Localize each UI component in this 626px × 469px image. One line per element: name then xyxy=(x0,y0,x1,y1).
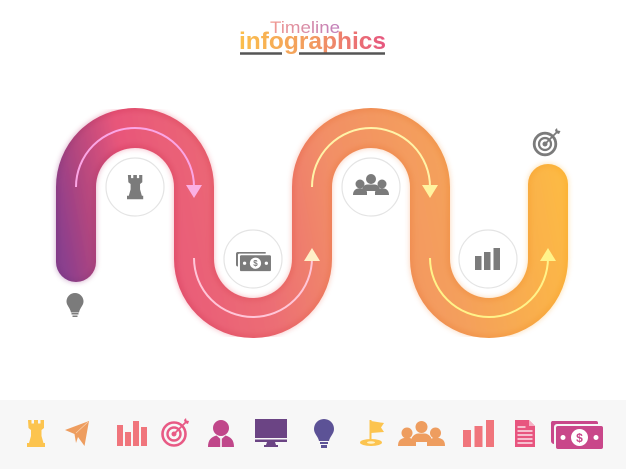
icon: money: $ xyxy=(576,431,583,445)
end icon: target xyxy=(534,128,560,155)
start icon: light bulb xyxy=(66,293,84,317)
icon: document xyxy=(515,420,535,447)
title line: Timeline: Timeline xyxy=(270,18,340,37)
arrow 1 xyxy=(76,128,202,198)
icon: flag xyxy=(360,420,384,446)
winding timeline road xyxy=(76,128,548,318)
title xyxy=(239,18,386,55)
title line: infographics: infographics xyxy=(239,28,386,55)
arrow 2 xyxy=(194,248,320,317)
icon: growth bars xyxy=(463,420,494,447)
icon: team xyxy=(398,421,445,446)
icon: bulb xyxy=(314,419,334,448)
step 2 circle with money icon: $ xyxy=(253,259,258,268)
arrow 3 xyxy=(312,128,438,198)
icon: monitor xyxy=(255,419,287,447)
arrow 4 xyxy=(430,248,556,317)
title underline xyxy=(240,52,385,55)
icon strip panel xyxy=(0,400,626,469)
step 3 circle with team icon xyxy=(342,158,400,216)
icon: rook xyxy=(27,420,45,447)
icon: paper plane xyxy=(65,421,89,446)
icon: target xyxy=(162,418,189,446)
icon: money xyxy=(551,421,603,449)
step 2 circle with money icon xyxy=(224,230,282,288)
icon: person xyxy=(208,420,234,447)
step 1 circle with rook icon xyxy=(106,158,164,216)
step 4 circle with bar chart icon xyxy=(459,230,517,288)
icon: bar chart xyxy=(117,421,147,446)
